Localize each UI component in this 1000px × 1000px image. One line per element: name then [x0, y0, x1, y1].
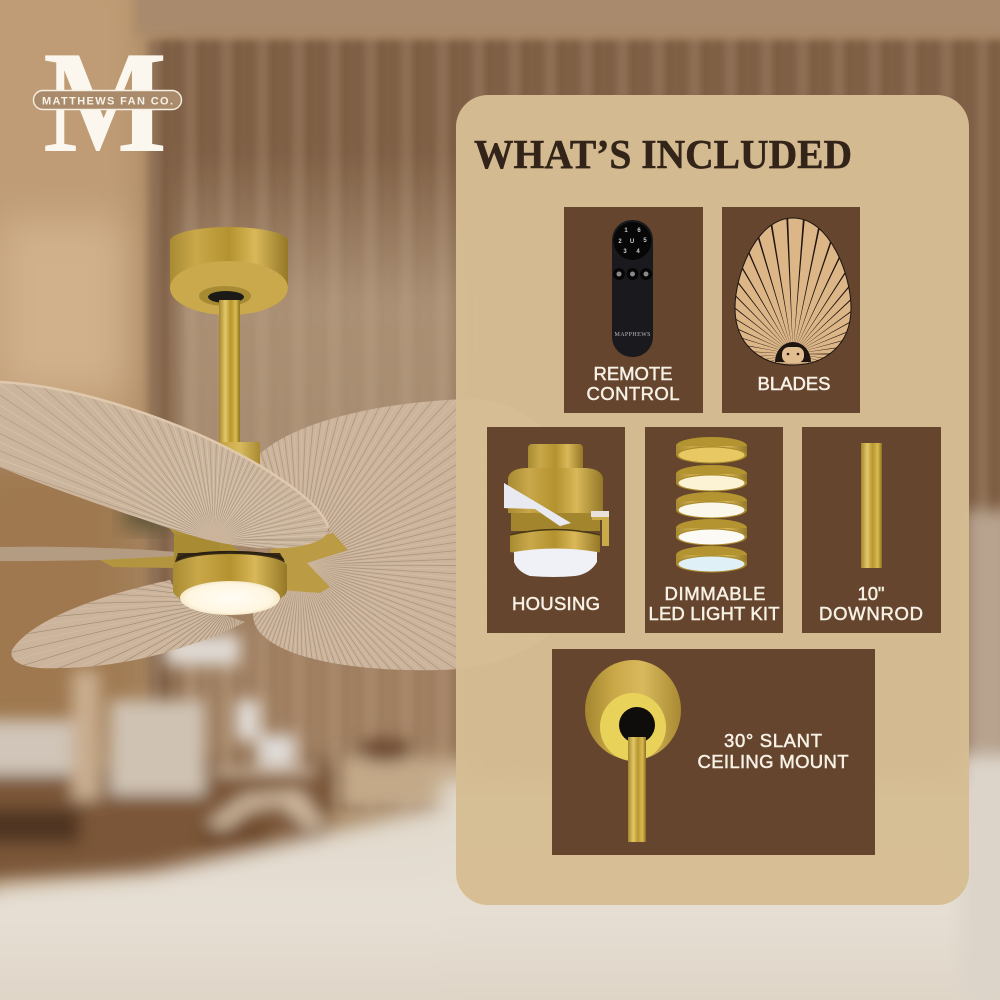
icon: remote: 3 — [623, 249, 627, 255]
item: downrod — [802, 427, 941, 633]
icon: light kit stack — [676, 437, 747, 572]
label: DIMMABLE — [664, 583, 766, 604]
icon: remote: 4 — [636, 249, 640, 255]
label: CEILING MOUNT — [698, 751, 848, 772]
blade: right — [253, 400, 456, 670]
icon: downrod — [861, 443, 882, 568]
rod collar — [210, 442, 260, 475]
label: BLADES — [758, 373, 830, 394]
heading: WHAT’S INCLUDED — [474, 131, 852, 177]
panel: what's included — [456, 95, 969, 905]
icon: ceiling mount — [585, 660, 681, 842]
item: blades — [722, 207, 860, 413]
icon: remote: MAPPHEWS — [614, 332, 650, 338]
label: CONTROL — [586, 383, 680, 404]
icon: remote: 6 — [637, 228, 641, 234]
label: HOUSING — [512, 593, 600, 614]
icon: remote: 2 — [618, 239, 622, 245]
icon: remote: U — [630, 239, 634, 245]
icon: remote: 1 — [624, 228, 628, 234]
canopy — [170, 227, 288, 315]
logo: MATTHEWS FAN CO. — [42, 96, 173, 108]
logo: M — [43, 21, 167, 183]
LED light — [180, 581, 280, 615]
label: REMOTE — [594, 363, 672, 384]
label: 10" — [858, 583, 884, 604]
item: remote control — [564, 207, 703, 413]
motor housing — [173, 552, 287, 606]
downrod — [219, 300, 240, 445]
blade: lower left — [11, 580, 245, 668]
blade arms — [100, 518, 348, 593]
label: LED LIGHT KIT — [648, 603, 780, 624]
blade: upper left — [0, 380, 329, 548]
icon: remote: 5 — [643, 238, 647, 244]
label: DOWNROD — [819, 603, 923, 624]
icon: housing — [504, 444, 609, 577]
item: dimmable LED light kit — [645, 427, 783, 633]
item: housing — [487, 427, 625, 633]
item: slant ceiling mount — [552, 649, 875, 855]
label: 30° SLANT — [724, 730, 822, 751]
icon: palm blade — [734, 218, 852, 366]
ceiling fan — [0, 227, 456, 670]
icon: remote — [612, 220, 653, 357]
blade: far left — [0, 547, 176, 561]
